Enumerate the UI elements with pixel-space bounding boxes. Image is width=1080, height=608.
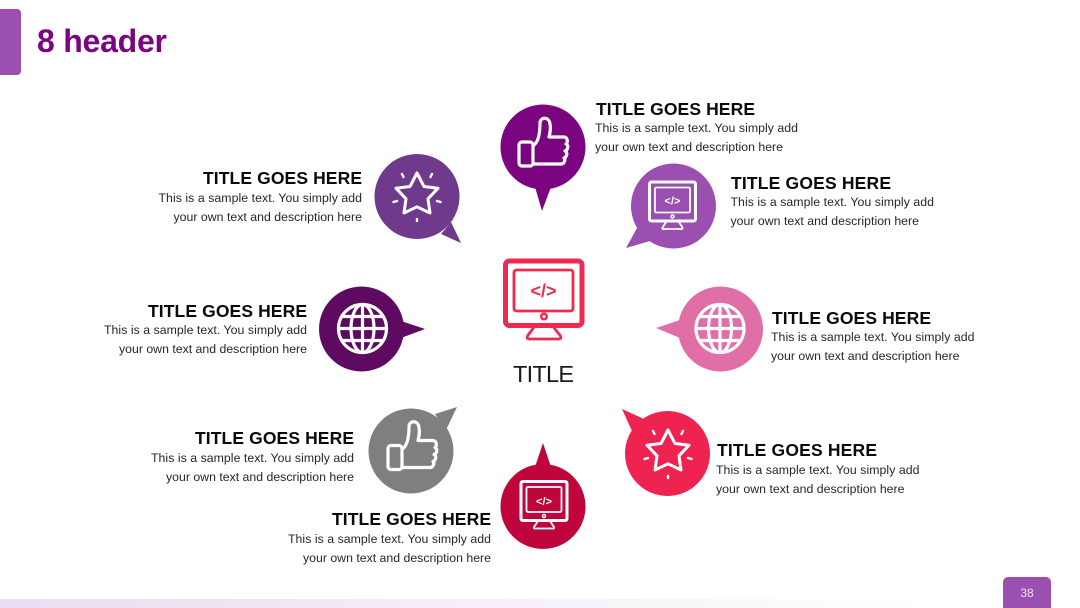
bubble: monitor violet (626, 164, 716, 248)
text: thumbs up purple: This is a sample text. You simply add (595, 121, 798, 135)
text: thumbs up purple: your own text and description here (595, 140, 783, 154)
page number (1003, 577, 1051, 608)
central monitor icon (506, 261, 582, 339)
text: star red: TITLE GOES HERE (717, 440, 877, 460)
central monitor icon: </> (530, 281, 557, 301)
bubble: thumbs up gray (368, 407, 457, 494)
text: thumbs up gray (151, 428, 354, 484)
text: star muted purple: This is a sample text. You simply add (158, 191, 362, 205)
text: thumbs up purple: TITLE GOES HERE (596, 99, 755, 119)
text: monitor crimson: your own text and description here (303, 551, 491, 565)
icon: thumbs up (388, 422, 437, 470)
bubble: globe pink (656, 286, 763, 372)
text: monitor violet (730, 173, 934, 228)
text: monitor crimson: TITLE GOES HERE (332, 509, 491, 529)
central label: TITLE (513, 361, 574, 387)
icon: star (394, 173, 440, 221)
icon: globe (338, 304, 386, 352)
page number: 38 (1020, 586, 1034, 600)
text: monitor violet: This is a sample text. You simply add (730, 195, 934, 209)
text: star muted purple: TITLE GOES HERE (203, 168, 362, 188)
icon: star (644, 430, 692, 478)
icon: monitor: </> (665, 196, 680, 208)
footer band (0, 599, 920, 608)
text: thumbs up gray: TITLE GOES HERE (195, 428, 354, 448)
bubble: star muted purple (374, 154, 461, 243)
text: globe pink (771, 308, 975, 363)
text: globe pink: TITLE GOES HERE (772, 308, 931, 328)
text: thumbs up gray: your own text and description here (166, 470, 354, 484)
text: thumbs up purple (595, 99, 798, 154)
title: 8 header (37, 23, 167, 59)
text: globe dark purple: This is a sample text. You simply add (104, 323, 307, 337)
bubble: globe dark purple (319, 286, 425, 372)
icon: thumbs up (519, 118, 568, 166)
text: globe pink: your own text and description here (771, 349, 960, 363)
icon: globe (696, 304, 744, 352)
text: monitor violet: TITLE GOES HERE (731, 173, 891, 193)
text: globe dark purple (104, 301, 307, 356)
text: star red: This is a sample text. You simply add (716, 463, 920, 477)
text: star muted purple (158, 168, 362, 224)
text: star red (716, 440, 920, 496)
text: monitor violet: your own text and description here (730, 214, 919, 228)
bubble: monitor crimson (500, 443, 586, 549)
bubble: thumbs up purple (500, 104, 586, 211)
text: star muted purple: your own text and description here (174, 210, 362, 224)
text: star red: your own text and description here (716, 482, 905, 496)
text: globe dark purple: your own text and description here (119, 342, 307, 356)
header accent tab (0, 9, 21, 75)
bubble: star red (622, 409, 710, 496)
icon: monitor: </> (536, 496, 552, 508)
text: monitor crimson (288, 509, 491, 565)
text: thumbs up gray: This is a sample text. You simply add (151, 451, 354, 465)
text: monitor crimson: This is a sample text. You simply add (288, 532, 491, 546)
text: globe pink: This is a sample text. You simply add (771, 330, 975, 344)
text: globe dark purple: TITLE GOES HERE (148, 301, 307, 321)
